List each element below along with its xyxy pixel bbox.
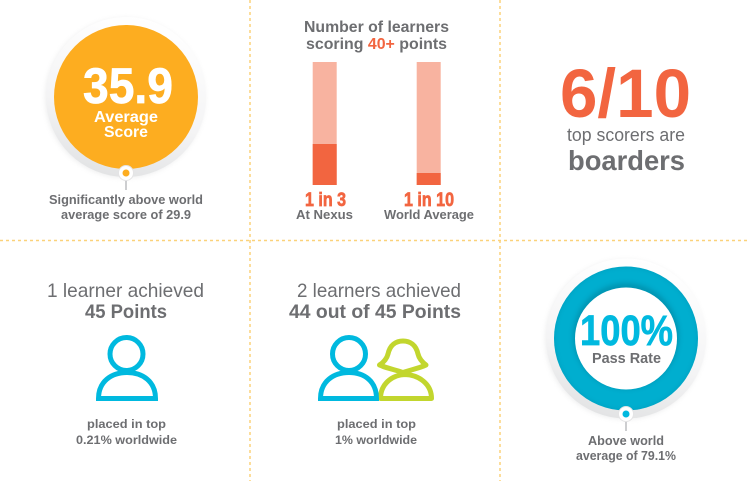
heading: Number of learners <box>304 19 449 36</box>
heading <box>304 19 449 53</box>
big number: 100%: 100% <box>580 307 673 355</box>
label: 1 in 10 world average <box>384 189 474 222</box>
icon: person <box>98 338 156 398</box>
heading: 44 out of 45 Points <box>289 302 461 323</box>
panel: learners scoring 40+ <box>296 19 474 222</box>
heading: 1 learner achieved <box>47 280 204 302</box>
panel: top scorers <box>560 55 691 176</box>
label: 1 in 10 world average: World Average <box>384 208 474 222</box>
label: 1 in 10 world average: 1 in 10 <box>404 189 454 211</box>
heading: 45 Points <box>85 302 167 323</box>
heading: scoring 40+ points <box>306 36 447 53</box>
caption: world average comparison: Significantly above world <box>49 193 203 207</box>
big number: 35.9: 35.9 <box>83 58 173 114</box>
icon: orange score circle <box>45 17 206 190</box>
caption: placed in top 1%: placed in top <box>337 417 416 431</box>
bar: world average <box>417 62 441 185</box>
text: boarders: boarders <box>568 145 685 176</box>
circle label: average score: Average <box>94 109 158 126</box>
caption: world average comparison <box>49 193 203 222</box>
panel: 1 learner achieved 45 points <box>47 280 204 447</box>
label: 1 in 3 at Nexus <box>296 189 353 222</box>
icon: male person <box>320 338 376 398</box>
heading: 2 learners achieved <box>297 280 461 302</box>
panel: 2 learners achieved 44 of 45 points <box>289 280 461 447</box>
circle label: average score <box>94 109 158 141</box>
text: top scorers are: top scorers are <box>567 125 685 145</box>
heading <box>47 280 204 323</box>
heading <box>289 280 461 323</box>
caption: above world average: Above world <box>588 434 664 448</box>
bar: at Nexus <box>313 62 337 185</box>
circle label: average score: Score <box>104 124 148 141</box>
caption: placed in top 0.21%: 0.21% worldwide <box>76 433 177 447</box>
caption: placed in top 1% <box>335 417 417 447</box>
panel: pass rate <box>545 258 706 463</box>
caption: placed in top 0.21%: placed in top <box>87 417 166 431</box>
caption: above world average: average of 79.1% <box>576 449 676 463</box>
icon: female person <box>380 341 432 398</box>
caption: placed in top 0.21% <box>76 417 177 447</box>
icon: cyan pass rate ring <box>545 258 706 431</box>
caption: world average comparison: average score of 29.9 <box>61 208 191 222</box>
circle label: pass rate: Pass Rate <box>592 350 661 367</box>
label: 1 in 3 at Nexus: At Nexus <box>296 208 353 222</box>
caption: above world average <box>576 434 676 463</box>
label: 1 in 3 at Nexus: 1 in 3 <box>305 189 346 211</box>
caption: placed in top 1%: 1% worldwide <box>335 433 417 447</box>
big number: 6/10: 6/10 <box>560 55 691 132</box>
panel: average score <box>45 17 206 222</box>
